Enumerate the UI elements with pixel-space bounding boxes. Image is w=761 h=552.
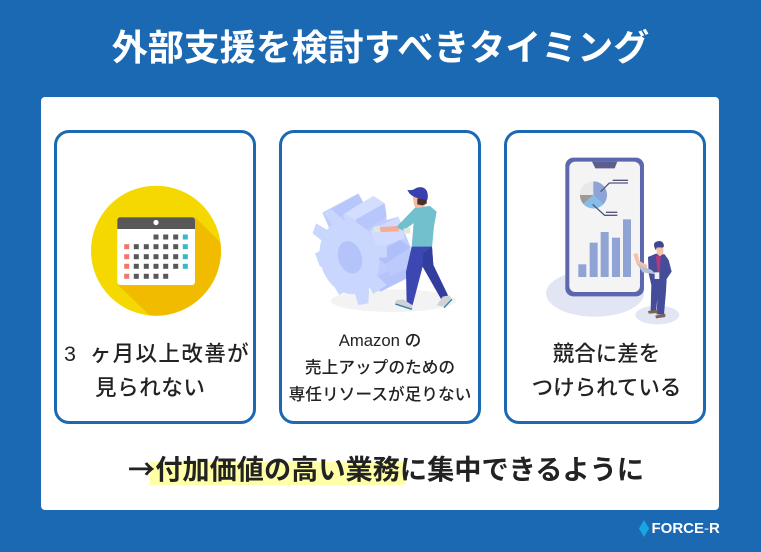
text: card 2 caption: 売上アップのための xyxy=(305,358,455,376)
bars xyxy=(578,219,631,277)
text: card 1 caption: 3 ヶ月以上改善が xyxy=(64,342,250,366)
panel: card 1 frame xyxy=(54,130,256,424)
title: 外部支援を検討すべきタイミング xyxy=(112,27,649,68)
text: card 1 caption xyxy=(64,342,250,400)
text: card 3 caption xyxy=(532,342,681,400)
businessman xyxy=(633,253,647,271)
text: card 3 caption: 競合に差を xyxy=(553,342,660,366)
text: card 2 caption: Amazon の xyxy=(339,330,421,350)
text: card 3 caption: つけられている xyxy=(532,376,681,400)
text: card 2 caption xyxy=(289,330,471,404)
panel: main white panel xyxy=(41,97,719,510)
highlight marker xyxy=(150,462,405,485)
man xyxy=(396,207,418,231)
text: card 2 caption: 専任リソースが足りない xyxy=(289,384,471,404)
pie xyxy=(580,181,607,209)
gear face xyxy=(312,214,387,301)
logo: FORCE-R: FORCE-R xyxy=(652,520,720,537)
panel: card 3 frame xyxy=(504,130,706,424)
panel: card 2 frame xyxy=(279,130,481,424)
text: card 1 caption: 見られない xyxy=(95,376,206,400)
icon: calendar xyxy=(91,186,221,316)
text: conclusion: →付加価値の高い業務に集中できるように xyxy=(128,446,644,486)
